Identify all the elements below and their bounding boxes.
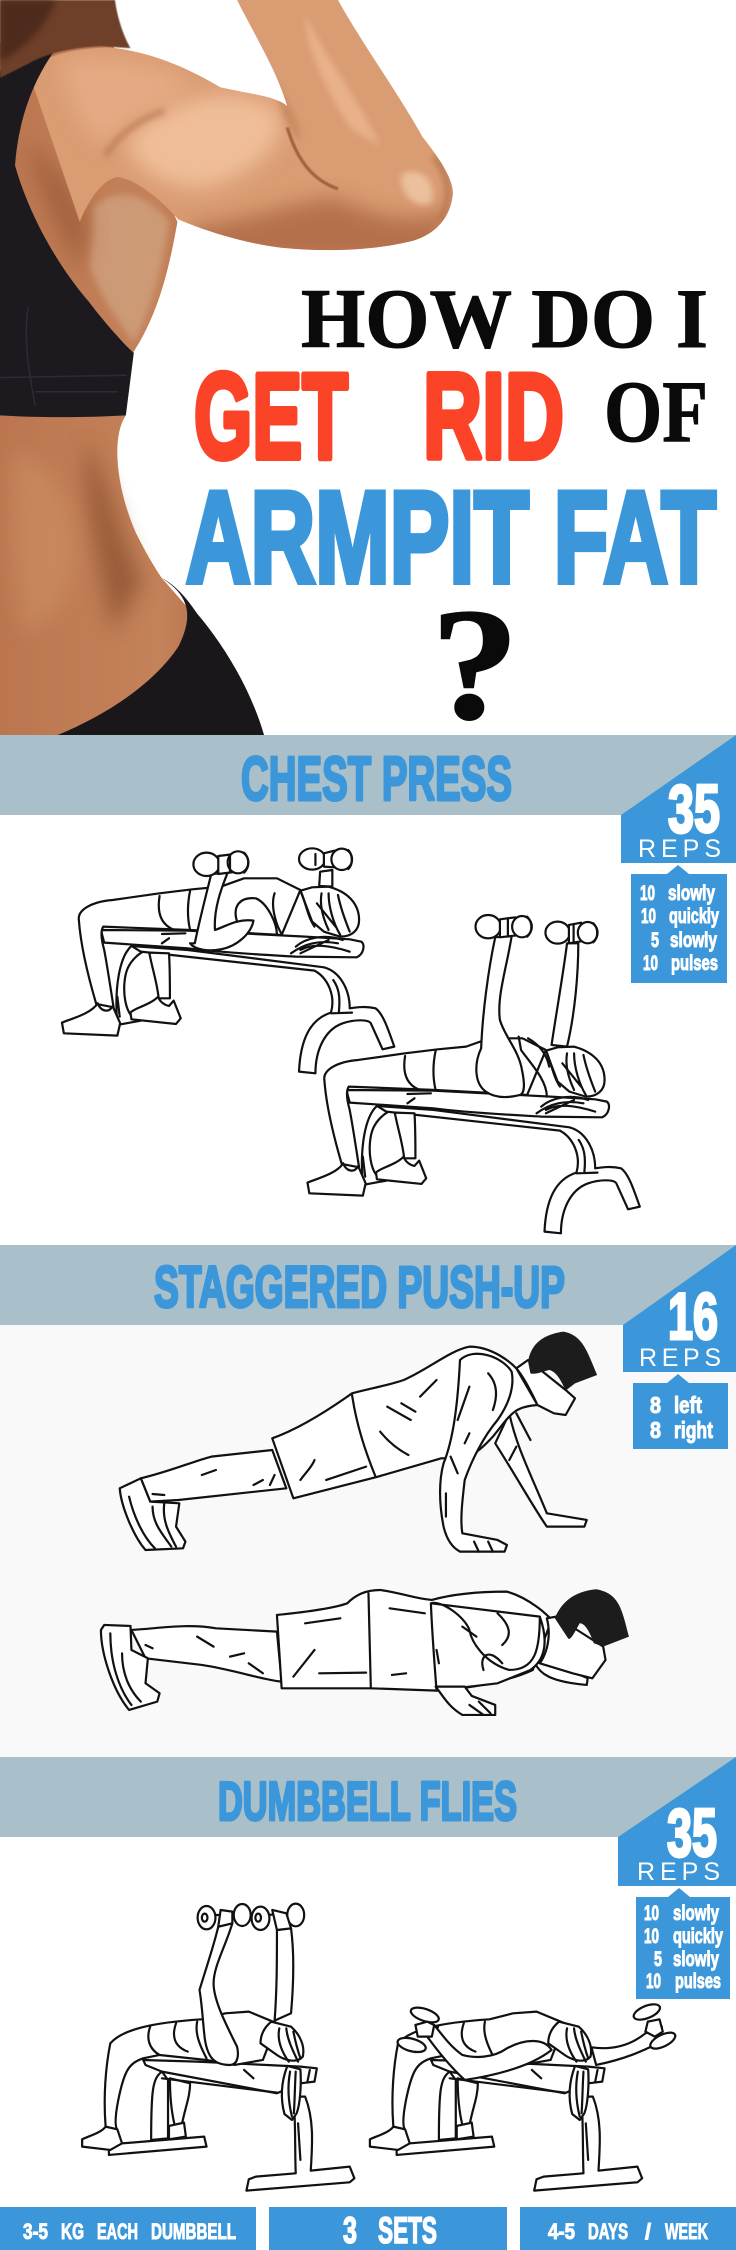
heading: DUMBBELL FLIES [218,1770,517,1832]
near arm and dumbbell [190,873,253,950]
heading: CHEST PRESS [241,745,512,814]
reps badge: REPS [638,835,721,863]
far arm and dumbbell [552,943,578,1047]
reps breakdown box: slowly [673,1902,719,1925]
section background [0,1325,736,1757]
footer: sets bar: 3 [343,2210,357,2250]
hair [0,0,130,78]
footer: frequency bar [520,2207,736,2250]
reps breakdown box: slowly [670,929,717,952]
panel: staggered push-up [0,1245,736,1757]
reps badge [621,735,736,863]
title: GET [194,348,348,484]
footer: sets bar: SETS [378,2210,437,2250]
reps badge: REPS [637,1858,720,1886]
far arm and dumbbell [591,2027,662,2065]
title: ? [431,575,519,753]
far arm [275,1928,293,2021]
reps breakdown box: 10 [640,882,655,905]
far arm and dumbbell [319,870,332,887]
footer: weight bar: 3-5 [23,2219,48,2244]
reps breakdown box: slowly [668,882,715,905]
near arm [199,1923,238,2065]
shorts [58,578,264,735]
reps breakdown box: 10 [641,905,656,928]
dumbbells [214,1913,289,1915]
footer: weight bar: EACH [97,2219,138,2244]
reps breakdown box: pulses [671,952,718,975]
heading band [0,735,736,815]
reps breakdown box: 8 [650,1392,661,1418]
heading band [0,1245,736,1325]
reps breakdown box: 5 [651,929,659,952]
footer: sets bar [269,2207,507,2250]
arm: forearm and upper arm [34,0,453,250]
reps breakdown box [631,865,727,983]
reps breakdown box: 10 [646,1970,661,1993]
figure: push-up bottom position [101,1589,629,1715]
footer: frequency bar: WEEK [665,2219,708,2244]
figure: chest press arms bent [62,848,394,1073]
reps breakdown box: 10 [644,1925,659,1948]
title: HOW DO I [301,272,708,366]
reps breakdown box: 5 [654,1948,662,1971]
near arm and dumbbell [476,936,524,1097]
title: OF [604,364,708,461]
reps breakdown box: 8 [650,1417,661,1443]
footer: weight bar [0,2207,256,2250]
footer: weight bar: KG [61,2219,84,2244]
reps breakdown box: left [674,1392,702,1418]
title: RID [423,348,564,484]
reps breakdown box: slowly [673,1948,719,1971]
reps breakdown box: 10 [644,1902,659,1925]
title [186,272,716,753]
panel: dumbbell flies [0,1757,736,2191]
footer: frequency bar: / [645,2219,651,2244]
footer: weight bar: DUMBBELL [151,2219,236,2244]
reps breakdown box: 10 [643,952,658,975]
figure: flies arms out [370,2001,679,2191]
figure: flies arms up [82,1904,354,2191]
reps breakdown box [636,1888,730,1999]
footer: frequency bar: 4-5 [548,2219,575,2244]
panel: chest press [0,735,736,1233]
footer: frequency bar: DAYS [588,2219,628,2244]
hero photo: woman's arm and torso [0,0,460,741]
black sports top [0,42,134,417]
reps badge [623,1245,736,1372]
near arm and dumbbell [422,2025,552,2080]
torso skin [0,42,188,735]
heading band [0,1757,736,1837]
reps badge: REPS [639,1344,721,1372]
reps breakdown box [633,1374,728,1449]
side back shading [89,195,169,342]
figure: chest press arms extended [307,915,640,1233]
figure: push-up top position [120,1332,597,1552]
reps breakdown box: right [674,1417,713,1443]
reps badge [618,1757,736,1886]
